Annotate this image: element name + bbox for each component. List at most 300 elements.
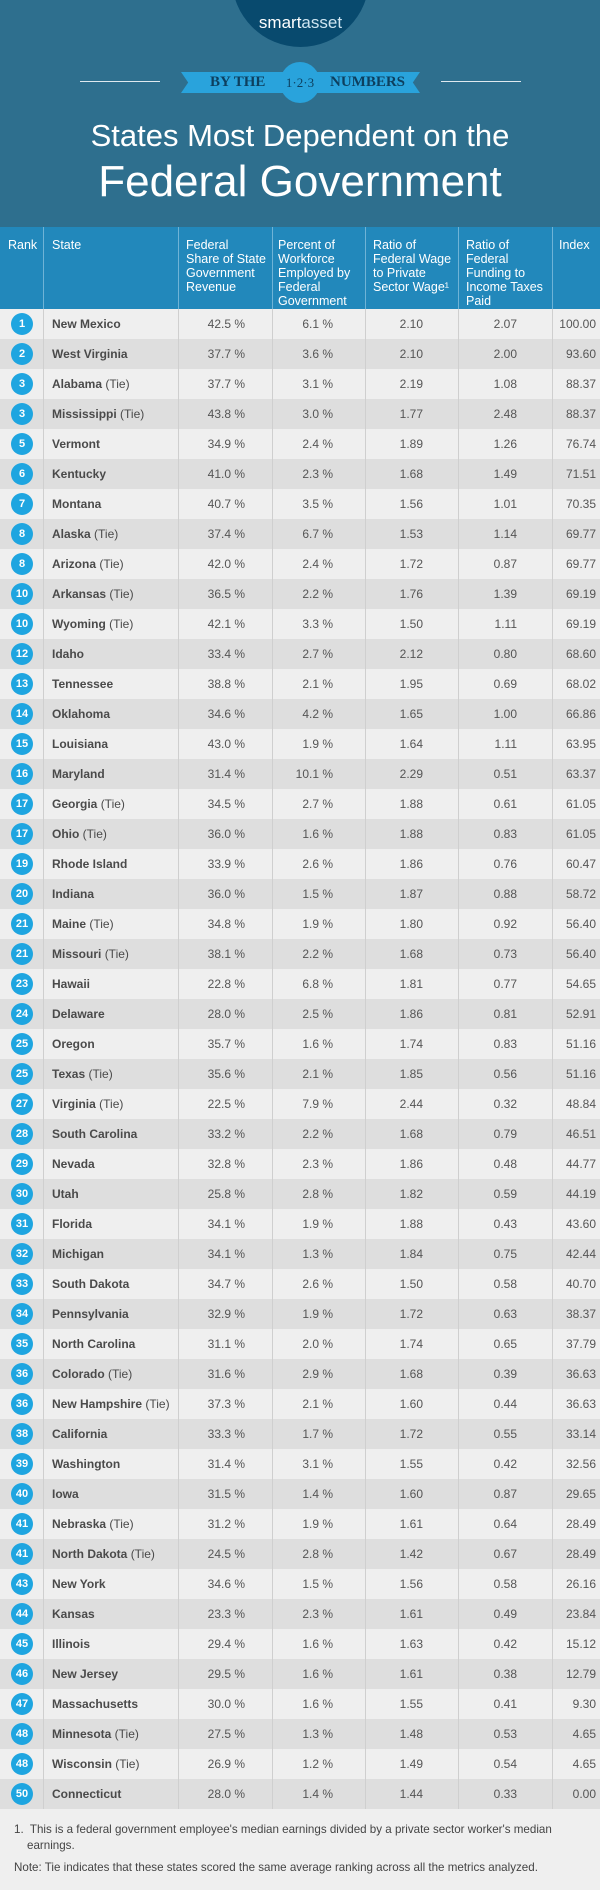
banner: by the numbers: BY THE [210,74,265,90]
table rows: 0.42 [494,1457,517,1471]
table rows: 41.0 % [208,467,245,481]
table rows: South Carolina [52,1127,137,1141]
table rows: 0.53 [494,1727,517,1741]
table rows: 2.6 % [302,1277,333,1291]
logo badge: smartasset [259,13,342,32]
table rows: Rhode Island [52,857,127,871]
table rows: Maine (Tie) [52,917,114,931]
table rows: Tennessee [52,677,113,691]
table rows: 22.8 % [208,977,245,991]
table rows: 44.19 [566,1187,596,1201]
table rows: 32.9 % [208,1307,245,1321]
table rows: 2.6 % [302,857,333,871]
table rows: Maryland [52,767,105,781]
table rows: New Jersey [52,1667,118,1681]
table rows: 36.63 [566,1397,596,1411]
table rows: 1.74 [400,1337,423,1351]
table rows: 1.3 % [302,1247,333,1261]
table rows: 29 [16,1158,28,1170]
table rows: 1.9 % [302,1307,333,1321]
table rows: 2.3 % [302,467,333,481]
table rows: 17 [16,828,28,840]
table rows: 2.3 % [302,1607,333,1621]
table header: Funding to [466,266,525,280]
table header: Revenue [186,280,236,294]
table rows: 48 [16,1728,28,1740]
table rows: 1.08 [494,377,517,391]
table rows: 2.10 [400,347,423,361]
table rows: Oregon [52,1037,95,1051]
table rows: 2.7 % [302,797,333,811]
table rows: 2 [19,348,25,360]
table rows: 1.00 [494,707,517,721]
table header: Government [186,266,255,280]
table rows: 60.47 [566,857,596,871]
table rows: 1.86 [400,857,423,871]
table rows: 33.2 % [208,1127,245,1141]
table rows: 42.0 % [208,557,245,571]
table rows: Pennsylvania [52,1307,129,1321]
table rows: 1.68 [400,947,423,961]
table rows: 15.12 [566,1637,596,1651]
table rows: 1.86 [400,1007,423,1021]
table rows: 1.85 [400,1067,423,1081]
table rows: 2.44 [400,1097,423,1111]
table rows: 1.56 [400,497,423,511]
table rows: 41 [16,1548,28,1560]
table rows: 0.76 [494,857,517,871]
logo badge [232,0,369,47]
table rows: 2.8 % [302,1547,333,1561]
table rows: Michigan [52,1247,104,1261]
table rows: 10.1 % [296,767,333,781]
table rows: Connecticut [52,1787,121,1801]
table rows: 0.83 [494,827,517,841]
table rows: 0.77 [494,977,517,991]
table rows: 1.4 % [302,1487,333,1501]
table rows: 16 [16,768,28,780]
table rows: 56.40 [566,917,596,931]
table rows: 2.1 % [302,677,333,691]
table rows: Alaska (Tie) [52,527,118,541]
table rows: 2.29 [400,767,423,781]
table rows: 1.86 [400,1157,423,1171]
table rows: 23 [16,978,28,990]
table rows: 37.7 % [208,377,245,391]
table rows: 40.70 [566,1277,596,1291]
table rows: 42.1 % [208,617,245,631]
table rows: 34.9 % [208,437,245,451]
table rows: 3.6 % [302,347,333,361]
table header: Federal [466,252,508,266]
table rows: 41 [16,1518,28,1530]
table rows: 1.60 [400,1487,423,1501]
table header: Income Taxes [466,280,543,294]
table rows: 1.72 [400,1427,423,1441]
table rows: 1.72 [400,1307,423,1321]
table rows: 2.10 [400,317,423,331]
table rows: 33 [16,1278,28,1290]
table rows: 48 [16,1758,28,1770]
table rows: 32.56 [566,1457,596,1471]
table rows: 10 [16,588,28,600]
table rows: 0.39 [494,1367,517,1381]
table rows: 1.65 [400,707,423,721]
table rows: 54.65 [566,977,596,991]
table rows: 13 [16,678,28,690]
table rows: 1.11 [495,737,517,751]
table rows: 0.38 [494,1667,517,1681]
table rows: Nebraska (Tie) [52,1517,134,1531]
table rows: 31.2 % [208,1517,245,1531]
table rows: 3.1 % [302,377,333,391]
table rows: 1.81 [400,977,423,991]
table rows: 5 [19,438,25,450]
table rows: 2.00 [494,347,517,361]
table rows: 1.2 % [302,1757,333,1771]
table rows: 31 [16,1218,28,1230]
table rows: 12 [16,648,28,660]
table rows: 7 [19,498,25,510]
table rows: 1.53 [400,527,423,541]
table rows: 71.51 [566,467,596,481]
table header: Paid [466,294,491,308]
table rows: 52.91 [566,1007,596,1021]
table rows: 27 [16,1098,28,1110]
table rows: 2.4 % [302,437,333,451]
table rows: Colorado (Tie) [52,1367,132,1381]
table rows: 33.4 % [208,647,245,661]
table rows: 0.87 [494,1487,517,1501]
table rows: New Mexico [52,317,121,331]
table rows: 10 [16,618,28,630]
table rows: 21 [16,918,28,930]
table rows: 38.1 % [208,947,245,961]
table rows: 45 [16,1638,28,1650]
table rows: 0.61 [494,797,517,811]
table rows: 0.88 [494,887,517,901]
table rows: 1.88 [400,1217,423,1231]
table header [0,227,600,309]
table rows: 8 [19,558,25,570]
table rows: Delaware [52,1007,105,1021]
table rows: 28.49 [566,1517,596,1531]
table rows: Idaho [52,647,84,661]
table rows: 23.3 % [208,1607,245,1621]
table rows: New Hampshire (Tie) [52,1397,170,1411]
table rows: Wyoming (Tie) [52,617,133,631]
title: States Most Dependent on the [91,118,509,153]
table rows: 19 [16,858,28,870]
table rows: 29.5 % [208,1667,245,1681]
table rows: 8 [19,528,25,540]
table rows: 0.43 [494,1217,517,1231]
table rows: 34.1 % [208,1217,245,1231]
table rows: 1.64 [400,737,423,751]
table rows: 2.19 [400,377,423,391]
table rows: 0.58 [494,1577,517,1591]
table rows: 1.84 [400,1247,423,1261]
table rows: Nevada [52,1157,95,1171]
table rows: 1.87 [400,887,423,901]
table rows: 93.60 [566,347,596,361]
table rows: 42.5 % [208,317,245,331]
table rows: 0.75 [494,1247,517,1261]
table rows: 38 [16,1428,28,1440]
table rows: 56.40 [566,947,596,961]
table rows: 1.68 [400,467,423,481]
table rows: 2.0 % [302,1337,333,1351]
table rows: New York [52,1577,106,1591]
footnote: 1. This is a federal government employee's median earnings divided by a private sector worker's median earnings. [14,1823,552,1852]
table rows: 1.89 [400,437,423,451]
table rows: 1.50 [400,1277,423,1291]
table rows: 0.00 [573,1787,596,1801]
table rows: 88.37 [566,377,596,391]
table rows: 1.60 [400,1397,423,1411]
table rows: 1.9 % [302,917,333,931]
table rows: 0.87 [494,557,517,571]
table rows: Utah [52,1187,79,1201]
table rows: 1.44 [400,1787,423,1801]
table rows: 31.5 % [208,1487,245,1501]
table header: Employed by [278,266,350,280]
table rows: 1.5 % [302,887,333,901]
table rows: 36.5 % [208,587,245,601]
table rows: 1.39 [494,587,517,601]
table rows: 1.82 [400,1187,423,1201]
table rows: North Dakota (Tie) [52,1547,155,1561]
table rows: 4.65 [573,1757,596,1771]
table rows: 1.49 [400,1757,423,1771]
table rows: 2.9 % [302,1367,333,1381]
table rows: 0.58 [494,1277,517,1291]
table rows: 1.68 [400,1367,423,1381]
table header: Rank [8,238,37,252]
table rows: 2.48 [494,407,517,421]
table rows: Louisiana [52,737,108,751]
table rows: 1.50 [400,617,423,631]
table rows: 3.0 % [302,407,333,421]
table rows: Minnesota (Tie) [52,1727,139,1741]
table rows: 36 [16,1398,28,1410]
table rows: 25 [16,1038,28,1050]
table rows: 1.3 % [302,1727,333,1741]
banner: by the numbers: NUMBERS [330,74,405,90]
table rows: 1.9 % [302,737,333,751]
table rows: 37.79 [566,1337,596,1351]
table rows: 1.95 [400,677,423,691]
table rows: 37.3 % [208,1397,245,1411]
table rows: 28.49 [566,1547,596,1561]
table rows: 1.26 [494,437,517,451]
footnote [14,1823,552,1874]
table rows: Missouri (Tie) [52,947,129,961]
table rows: Texas (Tie) [52,1067,113,1081]
table rows: 25 [16,1068,28,1080]
table rows: 1.4 % [302,1787,333,1801]
table rows: 1 [19,318,25,330]
table rows: 4.65 [573,1727,596,1741]
table rows: 31.4 % [208,1457,245,1471]
table rows: 12.79 [566,1667,596,1681]
table rows: 4.2 % [302,707,333,721]
table rows: 43 [16,1578,28,1590]
table rows: 33.3 % [208,1427,245,1441]
table rows: 34.5 % [208,797,245,811]
table rows: Indiana [52,887,94,901]
table rows: 28.0 % [208,1787,245,1801]
table rows: 38.8 % [208,677,245,691]
table rows: 1.77 [400,407,423,421]
table rows: 36.0 % [208,887,245,901]
table rows: 68.02 [566,677,596,691]
table rows: 31.6 % [208,1367,245,1381]
table rows: 9.30 [573,1697,596,1711]
table rows: 0.42 [494,1637,517,1651]
table rows: 34.6 % [208,1577,245,1591]
table rows: 0.54 [494,1757,517,1771]
table rows: 2.2 % [302,1127,333,1141]
table header: Federal Wage [373,252,451,266]
table rows: 3.1 % [302,1457,333,1471]
table rows: West Virginia [52,347,128,361]
footnote: Note: Tie indicates that these states scored the same average ranking across all the metrics analyzed. [14,1861,538,1874]
table rows: 37.7 % [208,347,245,361]
table rows: 1.9 % [302,1517,333,1531]
table rows: 69.19 [566,617,596,631]
table rows: 58.72 [566,887,596,901]
table rows: 31.4 % [208,767,245,781]
table rows: 3.3 % [302,617,333,631]
table rows: 15 [16,738,28,750]
table rows: 40 [16,1488,28,1500]
table rows: 46.51 [566,1127,596,1141]
table rows: 1.6 % [302,827,333,841]
table rows: 26.9 % [208,1757,245,1771]
table rows: Montana [52,497,101,511]
table rows: North Carolina [52,1337,135,1351]
table rows: 0.65 [494,1337,517,1351]
table rows: 46 [16,1668,28,1680]
table rows: 50 [16,1788,28,1800]
table rows: 1.61 [400,1517,423,1531]
table rows: 1.80 [400,917,423,931]
table rows: 39 [16,1458,28,1470]
table rows: 35.7 % [208,1037,245,1051]
banner: by the numbers [80,62,521,103]
table rows: 32.8 % [208,1157,245,1171]
table rows: 44 [16,1608,28,1620]
table rows: 25.8 % [208,1187,245,1201]
table rows: 2.2 % [302,947,333,961]
table rows: 28 [16,1128,28,1140]
table rows: 1.48 [400,1727,423,1741]
table rows: 47 [16,1698,28,1710]
table rows: 69.77 [566,527,596,541]
table rows: 21 [16,948,28,960]
table rows: 43.8 % [208,407,245,421]
table rows: 3.5 % [302,497,333,511]
table rows: 100.00 [559,317,596,331]
table rows: 1.68 [400,1127,423,1141]
table rows: 36.63 [566,1367,596,1381]
table rows: 2.1 % [302,1397,333,1411]
table rows: 1.88 [400,797,423,811]
table rows: 0.79 [494,1127,517,1141]
table rows: 1.01 [494,497,517,511]
table rows: 0.44 [494,1397,517,1411]
table header: Ratio of [466,238,509,252]
table rows: Alabama (Tie) [52,377,130,391]
table rows: 2.12 [400,647,423,661]
table rows: 88.37 [566,407,596,421]
header background [0,0,600,227]
table rows: Kentucky [52,467,106,481]
table rows: 2.4 % [302,557,333,571]
table rows: Ohio (Tie) [52,827,107,841]
table rows: Illinois [52,1637,90,1651]
table rows: 6 [19,468,25,480]
table rows: 6.8 % [302,977,333,991]
table rows: 1.5 % [302,1577,333,1591]
table rows: 38.37 [566,1307,596,1321]
table rows: 6.7 % [302,527,333,541]
table rows: 66.86 [566,707,596,721]
table rows: 26.16 [566,1577,596,1591]
table rows: 34.6 % [208,707,245,721]
table rows: 1.6 % [302,1637,333,1651]
table rows: 35 [16,1338,28,1350]
header background: Federal Government [98,157,502,206]
table rows: 1.88 [400,827,423,841]
table rows: 17 [16,798,28,810]
table rows: 0.32 [494,1097,517,1111]
table rows: 70.35 [566,497,596,511]
table rows: 1.55 [400,1697,423,1711]
table rows: 1.42 [400,1547,423,1561]
table rows: 61.05 [566,827,596,841]
table rows: 44.77 [566,1157,596,1171]
table rows: 3 [19,408,25,420]
table rows: 0.59 [494,1187,517,1201]
table rows [0,313,600,1809]
table rows: 1.6 % [302,1037,333,1051]
table rows: 2.5 % [302,1007,333,1021]
table rows: Mississippi (Tie) [52,407,144,421]
table rows: 33.9 % [208,857,245,871]
table rows: 6.1 % [302,317,333,331]
table rows: Massachusetts [52,1697,138,1711]
table rows: 2.1 % [302,1067,333,1081]
table rows: 0.49 [494,1607,517,1621]
table rows: 36.0 % [208,827,245,841]
table rows: 0.80 [494,647,517,661]
table rows: 34.7 % [208,1277,245,1291]
table rows: 1.6 % [302,1697,333,1711]
table rows: 34 [16,1308,28,1320]
table rows: 1.61 [400,1607,423,1621]
table rows: California [52,1427,107,1441]
table rows: 36 [16,1368,28,1380]
table rows: 31.1 % [208,1337,245,1351]
table rows: 63.95 [566,737,596,751]
table header: Government [278,294,347,308]
table header: Index [559,238,590,252]
table rows: 0.69 [494,677,517,691]
table rows: Hawaii [52,977,90,991]
table rows: 0.64 [494,1517,517,1531]
